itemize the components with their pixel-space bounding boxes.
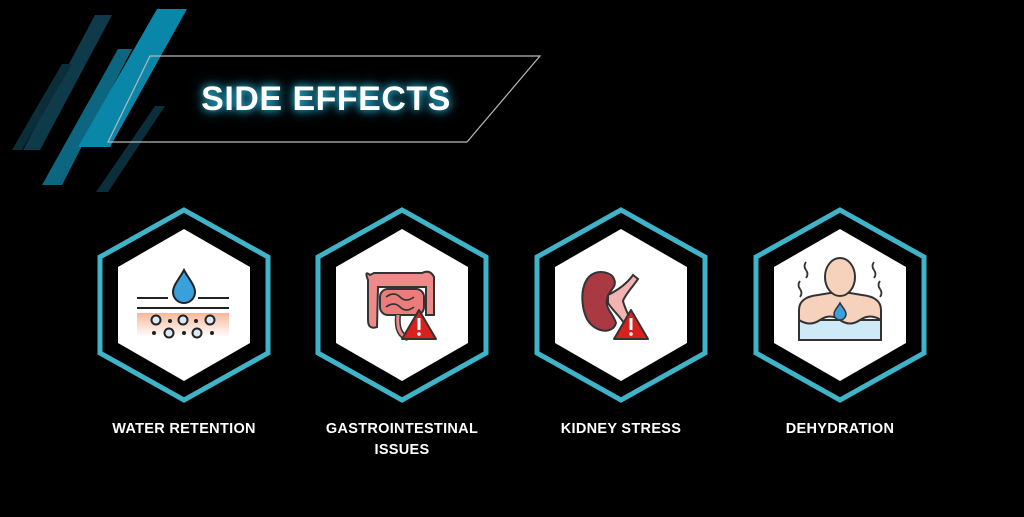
icon: kidney with warning [582, 272, 648, 339]
icon: sweating person [798, 258, 882, 340]
label: kidney stress: KIDNEY STRESS [561, 421, 681, 437]
decorative stripes [12, 9, 187, 192]
icon: intestines with warning [366, 272, 436, 339]
hexagon: kidney stress [537, 210, 705, 400]
hexagon: water retention [100, 210, 268, 400]
label: gastrointestinal issues: GASTROINTESTINAL [326, 421, 478, 437]
label: water retention: WATER RETENTION [112, 421, 256, 437]
label: dehydration: DEHYDRATION [786, 421, 894, 437]
label: gastrointestinal issues: ISSUES [374, 442, 430, 458]
title: SIDE EFFECTS [201, 80, 451, 118]
hexagon: gastrointestinal [318, 210, 486, 400]
icon: water drop on skin [137, 270, 229, 338]
hexagon: dehydration [756, 210, 924, 400]
title frame [108, 56, 540, 142]
label: gastrointestinal issues [326, 421, 478, 458]
